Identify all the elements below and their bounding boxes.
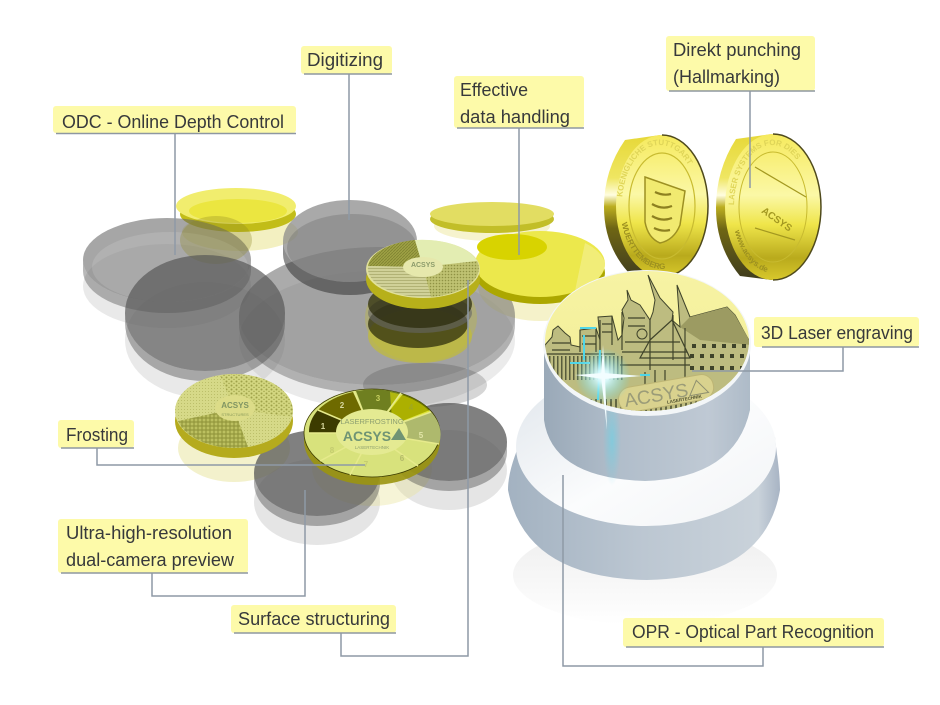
gray disc: large centre [239,247,515,394]
label: Direkt punching: Direkt punching [673,40,801,60]
yellow disc: left back [176,188,296,232]
city engraving: ACSYS [623,380,690,412]
gray disc: lower left [254,430,380,526]
label: Surface structuring [231,605,396,633]
label: Effective data handling: data handling [460,107,570,127]
label: Effective data handling [454,76,584,128]
icon: right medal [716,133,822,281]
numbered laser frosting disc: 6 [400,454,405,463]
label: OPR [623,618,884,647]
numbered laser frosting disc: 8 [330,446,335,455]
frosting disc [175,374,293,458]
numbered laser frosting disc: 5 [419,431,424,440]
leader lines [97,74,843,666]
label: Ultra-high-resolution: dual-camera preview [66,550,235,570]
yellow disc: right back [430,202,554,233]
pedestal neck [544,341,750,481]
yellow disc seen through gray [180,216,252,264]
label: Surface structuring: Surface structuring [238,609,390,629]
panel: gray and yellow discs group [83,188,605,545]
pedestal [508,270,780,580]
pedestal base side [508,437,780,580]
numbered laser frosting disc: 7 [364,460,369,469]
coin stack: ACSYS [411,262,435,269]
label: Ultra-high-resolution: Ultra-high-resolution [66,523,232,543]
numbered laser frosting disc: 1 [321,422,326,431]
gray disc: centre shadow [363,363,487,407]
city engraving [545,275,752,420]
label: Digitizing: Digitizing [307,50,383,70]
icon: right medal: ACSYS [759,206,794,235]
label: 3D Laser engraving [754,317,919,347]
gray disc: left middle [125,255,285,381]
label: Frosting [58,420,134,448]
label: Direkt punching [666,36,815,91]
icon: left medal: KOENIGLICHE STUTTGART [616,140,693,196]
numbered laser frosting disc [304,389,441,485]
gray disc: digitizing [283,200,417,295]
label: ODC [53,106,296,134]
city engraving: LASERTECHNIK [667,394,703,405]
pedestal reflection [513,525,777,625]
disc reflections [83,211,602,545]
numbered laser frosting disc: 4 [409,403,414,412]
icon: right medal: www.acsys.de [735,230,768,272]
numbered laser frosting disc: ACSYS [343,428,391,444]
label: Ultra-high-resolution [58,519,248,573]
label: 3D Laser engraving: 3D Laser engraving [761,323,913,343]
label: ODC: ODC - Online Depth Control [62,112,284,132]
numbered laser frosting disc: 3 [376,394,381,403]
gray disc: upper left [83,218,251,313]
yellow disc: data handling [475,231,605,304]
icon: left medal: WUERTTEMBERG [622,222,665,269]
frosting disc: ACSYS [221,401,249,410]
frosting disc: STRUCTURES [221,412,249,417]
label: Direkt punching: (Hallmarking) [673,67,780,87]
coin stack [365,240,480,363]
engraved top [543,270,752,420]
label: Frosting: Frosting [66,425,128,445]
label: Effective data handling: Effective [460,80,528,100]
numbered laser frosting disc: 2 [340,401,345,410]
numbered laser frosting disc: LASERFROSTING [340,417,404,426]
icon: right medal: LASER SYSTEMS FOR DIES [728,140,800,205]
icon: left medal [604,134,709,274]
label: Digitizing [301,46,392,74]
coin sectors [368,240,423,267]
numbered laser frosting disc: LASERTECHNIK [355,445,389,450]
laser spark [575,345,642,430]
gray disc: lower right [391,403,507,491]
pedestal base top [516,368,776,526]
label: OPR: OPR - Optical Part Recognition [632,622,874,642]
